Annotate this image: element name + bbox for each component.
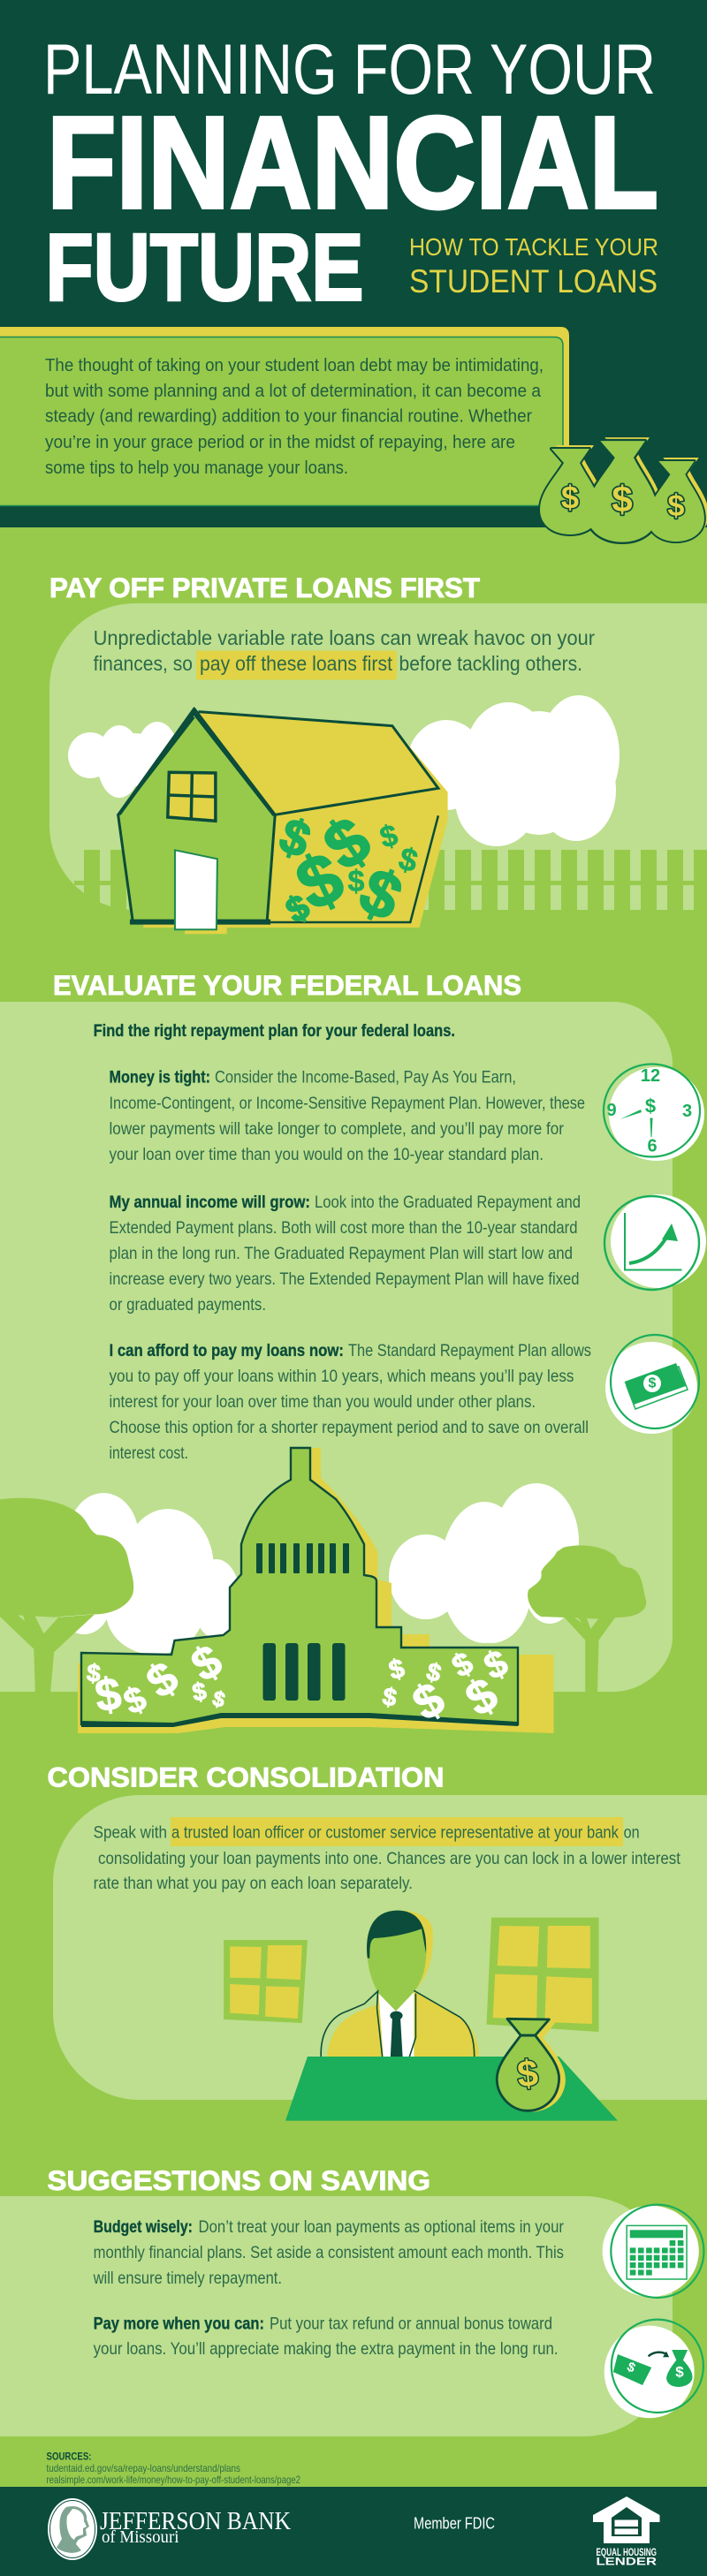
desk xyxy=(285,2057,618,2121)
icon: clock: $ xyxy=(645,1095,656,1117)
dollar signs on capitol: $ xyxy=(86,1659,103,1687)
icon: house door xyxy=(175,850,217,929)
private loans text xyxy=(94,626,595,680)
icon: cash stack xyxy=(605,1335,699,1434)
panel: private loans xyxy=(49,603,707,910)
dollar signs on capitol: $ xyxy=(118,1678,152,1723)
paragraph: my annual income will grow: Look into the Graduated Repayment and xyxy=(315,1193,581,1212)
capitol columns xyxy=(256,1543,349,1701)
icon: money bags xyxy=(540,437,707,542)
paragraph: i can afford to pay my loans now: I can afford to pay my loans now: xyxy=(110,1341,344,1360)
paragraph: pay more when you can: Pay more when you can: xyxy=(94,2315,264,2334)
logo: equal housing lender: LENDER xyxy=(596,2555,657,2567)
dollar signs on house wall: $ xyxy=(376,818,401,855)
icon: clock: 3 xyxy=(682,1102,692,1121)
heading: pay off private loans first: PAY OFF PRIVATE LOANS FIRST xyxy=(49,572,480,603)
logo: jefferson bank xyxy=(48,2498,291,2560)
icon: money to savings bag: $ xyxy=(675,2364,684,2380)
icon: cash stack: $ xyxy=(649,1376,657,1390)
panel: consolidation xyxy=(53,1795,707,2100)
sources: SOURCES: xyxy=(46,2451,92,2463)
office scene xyxy=(224,1911,618,2121)
consolidation text: a trusted loan officer or customer service representative at your bank xyxy=(171,1823,619,1843)
paragraph: my annual income will grow: or graduated payments. xyxy=(110,1295,266,1315)
trees xyxy=(0,1498,646,1692)
dollar signs on house wall: $ xyxy=(395,840,422,879)
dollar signs on house wall: $ xyxy=(348,865,365,898)
dollar signs on capitol: $ xyxy=(457,1668,506,1726)
intro text: The thought of taking on your student loan debt may be intimidating, xyxy=(45,355,544,375)
dollar on desk bag: $ xyxy=(515,2052,540,2095)
subtitle xyxy=(409,233,658,299)
icon: money bag on desk xyxy=(497,2019,566,2112)
icon: growth chart xyxy=(604,1194,706,1290)
paragraph: budget wisely: monthly financial plans. Set aside a consistent amount each month. This xyxy=(94,2243,564,2262)
intro text: but with some planning and a lot of determination, it can become a xyxy=(45,381,542,401)
intro text: steady (and rewarding) addition to your financial routine. Whether xyxy=(45,406,532,426)
paragraph: my annual income will grow: plan in the long run. The Graduated Repayment Plan will start low and xyxy=(110,1244,573,1263)
dollar signs on house wall xyxy=(273,802,422,935)
intro text xyxy=(45,355,544,478)
sources xyxy=(46,2451,300,2486)
paragraph: i can afford to pay my loans now xyxy=(110,1341,591,1463)
panel: federal loans xyxy=(0,1002,673,1692)
dollar signs on capitol: $ xyxy=(210,1686,228,1713)
icon: money to savings bag: $ xyxy=(625,2360,638,2376)
heading: evaluate your federal loans: EVALUATE YOUR FEDERAL LOANS xyxy=(53,969,521,1001)
intro panel xyxy=(0,327,569,505)
icon: left window xyxy=(224,1940,308,2023)
member fdic: Member FDIC xyxy=(414,2514,495,2532)
paragraph: i can afford to pay my loans now: you to pay off your loans within 10 years, which means you’ll pay less xyxy=(110,1367,574,1386)
consolidation text xyxy=(94,1817,681,1893)
dollar signs on house wall: $ xyxy=(285,837,355,927)
private loans text: pay off these loans first xyxy=(200,652,393,675)
federal loans text: Find the right repayment plan for your federal loans. xyxy=(94,1021,455,1041)
dollar signs on capitol: $ xyxy=(404,1672,453,1731)
paragraph: i can afford to pay my loans now: interest for your loan over time than you would under other plans. xyxy=(110,1392,536,1412)
icon: clock: 9 xyxy=(606,1101,617,1120)
heading: suggestions on saving: SUGGESTIONS ON SAVING xyxy=(48,2164,430,2196)
paragraph: pay more when you can: your loans. You’ll appreciate making the extra payment in the long run. xyxy=(94,2339,559,2359)
paragraph: money is tight: your loan over time than you would on the 10-year standard plan. xyxy=(110,1145,544,1164)
dollar signs on house wall: $ xyxy=(349,853,413,935)
dollar signs on house wall: $ xyxy=(273,807,317,868)
dollar signs on capitol: $ xyxy=(381,1682,399,1712)
dollar signs on capitol xyxy=(86,1635,514,1731)
paragraph: budget wisely: Budget wisely: xyxy=(94,2217,193,2237)
icon: clock: 12 xyxy=(641,1066,660,1086)
title xyxy=(43,30,658,320)
paragraph: i can afford to pay my loans now: The Standard Repayment Plan allows xyxy=(348,1341,591,1360)
paragraph: money is tight: Money is tight: xyxy=(110,1067,210,1087)
paragraph: budget wisely xyxy=(93,2217,564,2288)
clouds behind capitol xyxy=(57,1483,579,1655)
dollar signs on house wall: $ xyxy=(279,887,316,931)
icon: clock xyxy=(604,1064,704,1161)
subtitle: HOW TO TACKLE YOUR xyxy=(409,233,658,261)
federal loans text xyxy=(94,1021,591,1463)
icon: right window xyxy=(487,1918,599,2032)
consolidation text: rate than what you pay on each loan separately. xyxy=(94,1874,413,1893)
dollar signs on capitol: $ xyxy=(445,1644,479,1685)
paragraph: pay more when you can xyxy=(94,2315,559,2359)
paragraph: pay more when you can: Put your tax refund or annual bonus toward xyxy=(270,2315,552,2334)
paragraph: money is tight: Consider the Income-Based, Pay As You Earn, xyxy=(215,1067,516,1087)
heading: consider consolidation: CONSIDER CONSOLIDATION xyxy=(48,1762,445,1793)
title: FUTURE xyxy=(46,214,364,320)
header band xyxy=(0,0,707,527)
paragraph: i can afford to pay my loans now: interest cost. xyxy=(110,1443,188,1463)
house xyxy=(117,707,448,935)
logo: equal housing lender: EQUAL HOUSING xyxy=(596,2546,657,2558)
dollar signs on house wall: $ xyxy=(310,802,384,885)
icon: money bags: $ xyxy=(612,479,633,519)
capitol building xyxy=(78,1448,553,1733)
icon: calendar xyxy=(603,2205,703,2298)
paragraph: money is tight: Income-Contingent, or Income-Sensitive Repayment Plan. However, these xyxy=(110,1094,585,1113)
consolidation text: on xyxy=(624,1823,640,1843)
logo: jefferson bank: JEFFERSON BANK xyxy=(100,2508,291,2535)
panel: saving xyxy=(0,2196,673,2436)
subtitle: STUDENT LOANS xyxy=(409,263,658,299)
icon: money bags: $ xyxy=(668,489,685,523)
private loans text: before tackling others. xyxy=(399,652,582,675)
fence xyxy=(74,850,707,910)
dollar signs on capitol: $ xyxy=(190,1677,209,1707)
private loans text: Unpredictable variable rate loans can wreak havoc on your xyxy=(94,626,595,649)
paragraph: budget wisely: will ensure timely repayment. xyxy=(93,2269,282,2288)
paragraph: my annual income will grow: Extended Payment plans. Both will cost more than the 10-year standard xyxy=(110,1218,578,1238)
icon: money bags: $ xyxy=(561,479,579,516)
dollar signs on capitol: $ xyxy=(138,1652,188,1708)
clouds behind house xyxy=(68,695,620,846)
consolidation text: Speak with xyxy=(94,1823,167,1843)
sources: realsimple.com/work-life/money/how-to-pay-off-student-loans/page2 xyxy=(46,2474,300,2486)
saving text xyxy=(93,2217,564,2359)
dollar signs on capitol: $ xyxy=(183,1635,231,1692)
dollar signs on capitol: $ xyxy=(423,1657,445,1687)
paragraph: my annual income will grow: My annual income will grow: xyxy=(110,1193,310,1212)
intro text: you’re in your grace period or in the midst of repaying, here are xyxy=(45,432,515,452)
intro text: some tips to help you manage your loans. xyxy=(45,458,348,478)
paragraph: money is tight xyxy=(110,1067,585,1164)
sources: tudentaid.ed.gov/sa/repay-loans/understand/plans xyxy=(46,2462,240,2474)
paragraph: money is tight: lower payments will take longer to complete, and you’ll pay more for xyxy=(110,1119,564,1139)
dollar signs on capitol: $ xyxy=(477,1641,514,1687)
icon: house window xyxy=(168,772,216,821)
paragraph: my annual income will grow: increase every two years. The Extended Repayment Plan will have fixed xyxy=(110,1269,580,1289)
logo: equal housing lender xyxy=(593,2496,659,2567)
paragraph: budget wisely: Don’t treat your loan payments as optional items in your xyxy=(198,2217,564,2237)
dollar signs on capitol: $ xyxy=(386,1654,408,1686)
icon: clock: 6 xyxy=(647,1136,658,1155)
dollar signs on capitol: $ xyxy=(92,1668,125,1723)
footer xyxy=(0,2487,707,2576)
person xyxy=(321,1911,479,2057)
private loans text: finances, so xyxy=(94,652,193,675)
icon: money to savings bag xyxy=(604,2320,703,2418)
paragraph: i can afford to pay my loans now: Choose this option for a shorter repayment period and to save on overall xyxy=(110,1418,589,1437)
logo: jefferson bank: of Missouri xyxy=(102,2527,179,2547)
paragraph: my annual income will grow xyxy=(110,1193,581,1315)
